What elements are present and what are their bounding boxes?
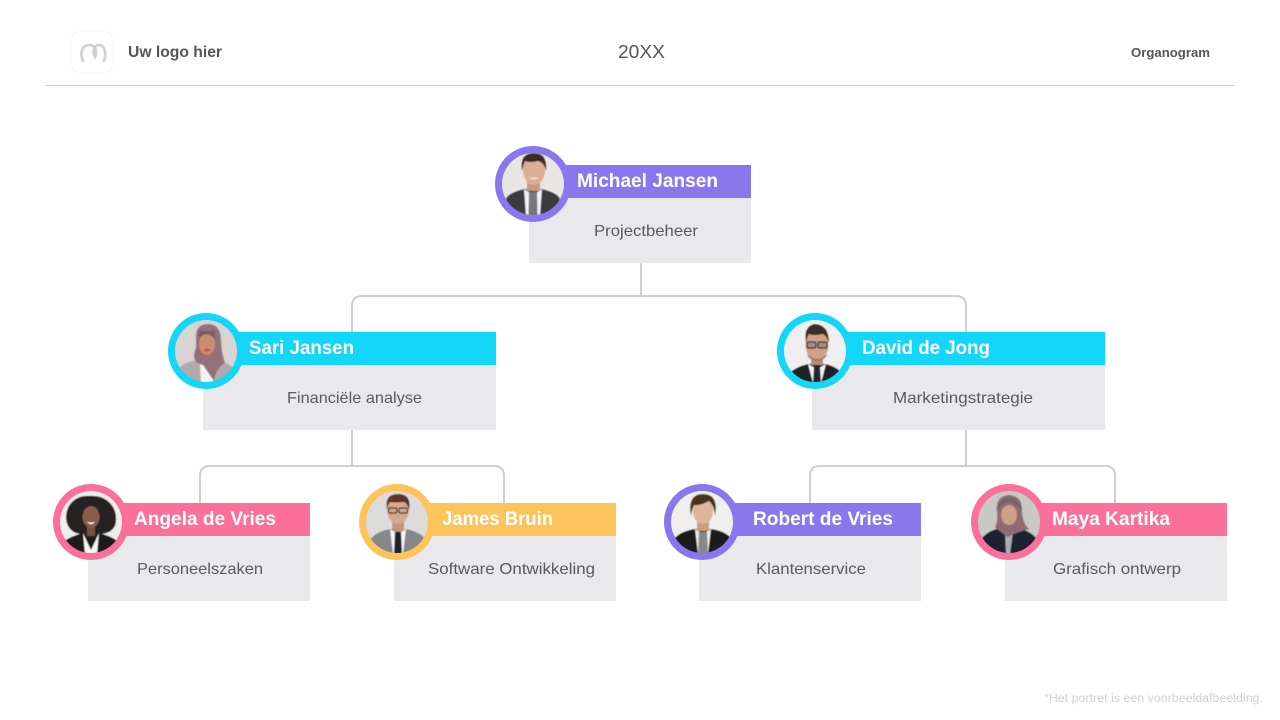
name: Maya Kartika (1052, 509, 1170, 530)
card: James Bruin (359, 484, 616, 601)
page title: Organogram (1131, 45, 1210, 60)
role: Personeelszaken (137, 561, 263, 578)
footnote: *Het portret is een voorbeeldafbeelding. (1044, 693, 1263, 705)
role: Software Ontwikkeling (428, 561, 595, 578)
name: David de Jong (862, 338, 990, 359)
portrait: Sari Jansen (174, 319, 238, 383)
role: Marketingstrategie (893, 390, 1033, 407)
portrait: David de Jong (783, 319, 847, 383)
header (45, 32, 1235, 86)
portrait: Robert de Vries (670, 490, 734, 554)
card: Angela de Vries (53, 484, 310, 601)
card: Michael Jansen (495, 146, 751, 263)
icon: logo placeholder (72, 32, 112, 72)
portrait: Maya Kartika (977, 490, 1041, 554)
name: Robert de Vries (753, 509, 893, 530)
role: Financiële analyse (287, 390, 422, 407)
name: Michael Jansen (577, 171, 718, 192)
connector lines (200, 263, 1115, 503)
logo text: Uw logo hier (128, 44, 222, 61)
card: Maya Kartika (971, 484, 1227, 601)
card: David de Jong (777, 313, 1105, 430)
portrait: Michael Jansen (501, 152, 565, 216)
name: James Bruin (442, 509, 553, 530)
name: Sari Jansen (249, 338, 354, 359)
card: Sari Jansen (168, 313, 496, 430)
name: Angela de Vries (134, 509, 276, 530)
role: Projectbeheer (594, 223, 699, 240)
card: Robert de Vries (664, 484, 921, 601)
year: 20XX (618, 41, 665, 62)
portrait: James Bruin (365, 490, 429, 554)
role: Klantenservice (756, 561, 866, 578)
role: Grafisch ontwerp (1053, 561, 1181, 578)
portrait: Angela de Vries (59, 490, 123, 554)
